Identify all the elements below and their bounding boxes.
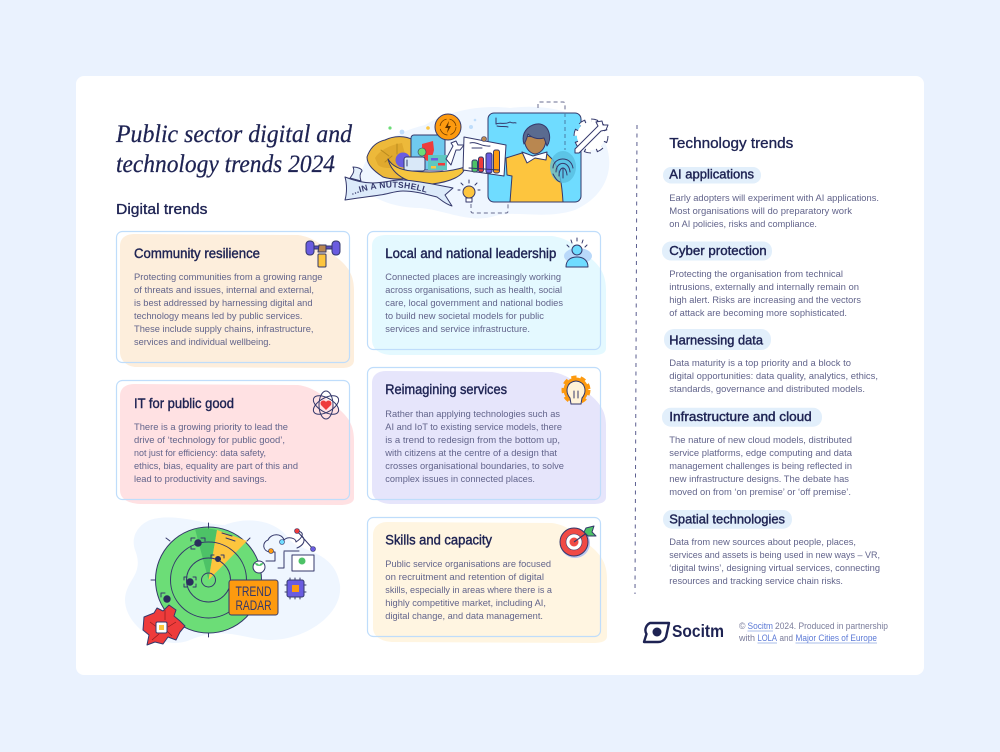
body text: [134, 422, 298, 485]
person: [506, 124, 563, 202]
icon: target and arrow: [560, 526, 596, 558]
circuit blocks: [428, 155, 447, 170]
illustration: in a nutshell: [344, 102, 609, 218]
front nut shell: [388, 159, 465, 184]
body text: Protecting the organisation from technical: [669, 269, 843, 280]
heading: IT for public good: [134, 396, 234, 411]
footer credits: [738, 621, 888, 643]
body text: crosses organisational boundaries, to solve: [385, 461, 564, 472]
body text: These include supply chains, infrastructure,: [134, 324, 314, 335]
trend radar label: [229, 580, 278, 615]
footer credits: Major Cities of Europe: [796, 633, 877, 643]
body text: [669, 269, 861, 319]
body text: complex issues in connected places.: [385, 474, 535, 485]
body text: with citizens at the centre of a design that: [384, 448, 557, 459]
body text: standards, governance and distributed models.: [669, 384, 865, 395]
title: Public sector digital and: [115, 119, 352, 148]
device screen: [411, 135, 445, 170]
lightbulb: [458, 180, 480, 202]
gear and wrench: [575, 121, 608, 153]
trend radar label: RADAR: [236, 597, 272, 613]
socitm logo: Socitm: [672, 621, 724, 641]
body text: ethics, bias, equality are part of this and: [134, 461, 298, 472]
highlight pill: [662, 408, 822, 427]
body text: intrusions, externally and internally remain on: [669, 282, 859, 293]
heading: AI applications: [669, 168, 754, 182]
heading: Skills and capacity: [385, 532, 492, 548]
banner: [344, 166, 454, 206]
trend radar label: TREND: [236, 583, 272, 599]
body text: Public service organisations are focused: [385, 559, 551, 570]
orange dial: [435, 114, 461, 140]
body text: Protecting communities from a growing range: [134, 272, 322, 283]
body text: service platforms, edge computing and data: [669, 448, 853, 459]
body text: highly competitive market, including AI,: [385, 598, 546, 609]
heading: Cyber protection: [669, 244, 767, 258]
body text: care, local government and national bodies: [385, 298, 563, 309]
body text: on recruitment and retention of digital: [385, 572, 544, 583]
highlight pill: [662, 242, 772, 260]
blue presentation panel: [488, 113, 581, 202]
footer credits: and: [780, 633, 793, 643]
heading: Community resilience: [134, 246, 260, 261]
body text: The nature of new cloud models, distributed: [669, 435, 852, 446]
body text: resources and tracking service chain risks.: [669, 576, 843, 587]
section: infrastructure and cloud: [662, 408, 853, 498]
footer credits: Socitm: [748, 621, 773, 631]
body text: AI and IoT to existing service models, there: [385, 422, 562, 433]
dots: [388, 119, 476, 134]
body text: lead to productivity and savings.: [134, 474, 267, 485]
body text: Early adopters will experiment with AI applications.: [669, 193, 879, 204]
heading: Spatial technologies: [669, 512, 785, 526]
section: harnessing data: [664, 329, 878, 395]
highlight pill: [664, 329, 771, 350]
icon: lightbulb gear: [564, 378, 588, 404]
fingerprint: [550, 151, 576, 183]
body text: of attack are becoming more sophisticated.: [669, 308, 847, 319]
socitm logo: [644, 621, 724, 642]
cloud network: [253, 528, 316, 573]
icon: person with rays: [564, 238, 592, 267]
body text: skills, especially in areas where there is a: [385, 585, 553, 596]
body text: not just for efficiency: data safety,: [134, 448, 266, 459]
highlight pill: [663, 510, 792, 529]
heading: digital trends: Digital trends: [116, 201, 208, 218]
body text: There is a growing priority to lead the: [134, 422, 288, 433]
body text: Data maturity is a top priority and a block to: [669, 358, 851, 369]
body text: moved on from ‘on premise’ or ‘off premise’.: [669, 487, 851, 498]
footer credits: LOLA: [758, 633, 777, 643]
body text: [669, 435, 853, 498]
body text: [669, 537, 880, 587]
icon: atom with heart: [310, 391, 342, 419]
body text: is best addressed by harnessing digital and: [134, 298, 312, 309]
body text: across organisations, such as health, social: [385, 285, 562, 296]
body text: [384, 409, 564, 485]
heading: technology trends: Technology trends: [669, 135, 793, 152]
shield: [422, 141, 434, 161]
heading: Infrastructure and cloud: [669, 410, 812, 424]
body text: to build new societal models for public: [385, 311, 544, 322]
chart board: [463, 136, 506, 176]
radar dish: [151, 523, 266, 637]
body text: is a trend to redesign from the bottom up,: [385, 435, 560, 446]
purple chip: [285, 578, 306, 599]
body text: high alert. Risks are increasing and the vectors: [669, 295, 861, 306]
body text: Connected places are increasingly working: [385, 272, 561, 283]
purple chip and server: [396, 152, 410, 168]
footer credits: with: [738, 633, 755, 643]
title: technology trends 2024: [116, 149, 335, 178]
panel: skills and capacity: [368, 518, 607, 643]
white page card: [76, 76, 924, 675]
body text: digital opportunities: data quality, analytics, ethics,: [669, 371, 878, 382]
heading: Local and national leadership: [385, 246, 556, 261]
body text: management challenges is being reflected in: [669, 461, 852, 472]
red puzzle piece: [143, 605, 185, 645]
icon: barbell: [306, 241, 340, 267]
panel: reimagining services: [368, 368, 606, 504]
body text: services and assets is being used in new ways – VR,: [669, 550, 880, 561]
body text: of threats and issues, internal and external,: [134, 285, 314, 296]
body text: [134, 272, 322, 348]
title: [115, 119, 352, 178]
body text: [669, 358, 878, 395]
body text: services and individual wellbeing.: [134, 337, 271, 348]
body text: [669, 193, 879, 230]
body text: on AI policies, risks and compliance.: [669, 219, 817, 230]
dashed connector lines: [471, 102, 565, 213]
back nut shell: [367, 137, 420, 179]
section: spatial technologies: [663, 510, 880, 587]
illustration: trend radar: [125, 517, 340, 645]
body text: [385, 272, 563, 335]
section: ai applications: [663, 167, 879, 230]
body text: services and service infrastructure.: [385, 324, 530, 335]
section: cyber protection: [662, 242, 861, 319]
panel: local and national leadership: [368, 232, 606, 355]
body text: Rather than applying technologies such as: [385, 409, 560, 420]
body text: [385, 559, 553, 622]
body text: drive of ‘technology for public good’,: [134, 435, 285, 446]
body text: ‘digital twins’, designing virtual services, connecting: [669, 563, 880, 574]
body text: technology means led by public services.: [134, 311, 302, 322]
banner: ...IN A NUTSHELL: [352, 182, 426, 195]
body text: new infrastructure designs. The debate has: [669, 474, 849, 485]
heading: Reimagining services: [385, 382, 507, 397]
heading: Harnessing data: [669, 333, 763, 347]
footer credits: ©: [739, 621, 746, 631]
wrench: [446, 141, 464, 165]
body text: Most organisations will do preparatory work: [669, 206, 852, 217]
panel: community resilience: [116, 232, 354, 368]
panel: it for public good: [116, 380, 354, 505]
footer credits: 2024. Produced in partnership: [775, 621, 888, 631]
highlight pill: [663, 167, 761, 184]
body text: digital change, and data management.: [385, 611, 543, 622]
body text: Data from new sources about people, places,: [669, 537, 856, 548]
